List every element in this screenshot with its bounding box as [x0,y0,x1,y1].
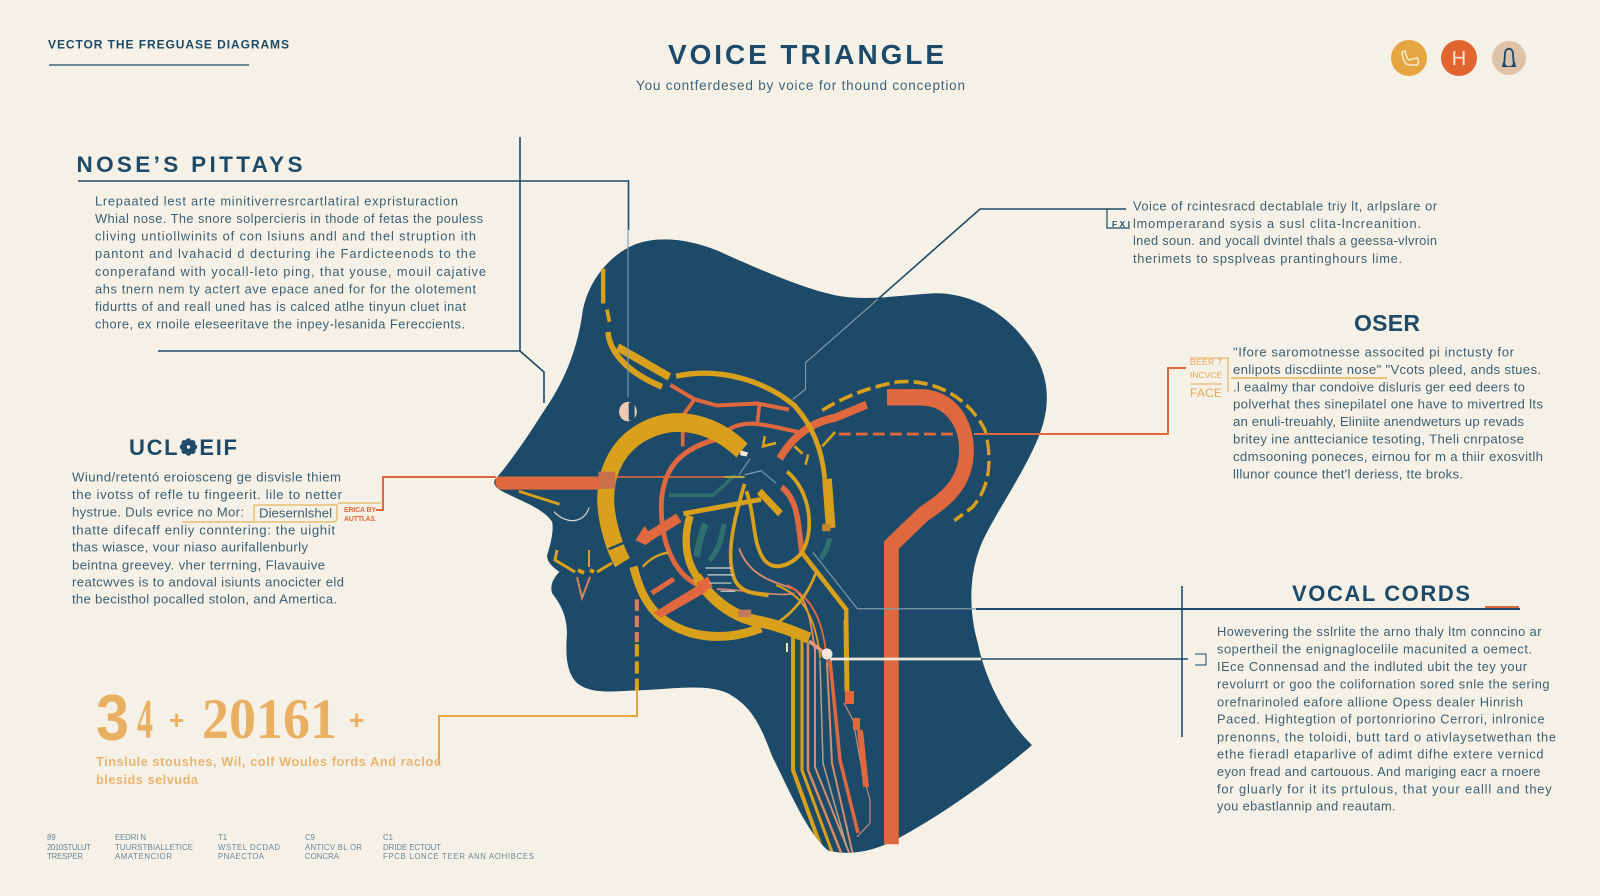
footer legend [47,833,534,861]
panel: vocal cords [1217,581,1556,814]
panel: oser [1190,310,1543,482]
stat caption: blesids selvuda [96,772,199,787]
text block: nose pathways: Whial nose. The snore solpercieris in thode of fetas the pouless [95,211,483,226]
text block: oser: an enuli-treuahly, Eliniite anendweturs up revads [1233,414,1524,429]
legend column 3: T1 [218,833,227,842]
callout line: nose stream [376,477,496,510]
orange dashed callout in head [839,431,957,438]
stat number: + [169,705,184,735]
stat number [96,681,364,754]
legend column 2: TUURSTBIALLETICE [115,843,193,852]
orange mini label: AUTTI.A3. [344,516,376,523]
teal inner shapes [669,475,830,561]
legend column 3: WSTEL DCDAD [218,843,280,852]
text block: vocal cords: revolurrt or goo the colifornation sored snle the sering [1217,676,1550,692]
highlighted term box: Diesernlshel [259,506,332,520]
icon: letter H: H [1452,48,1466,70]
panel: big stat [96,681,441,787]
gold mini label: INCVCE [1190,370,1222,380]
text block: vocal cords: for gluarly for it its prtulous, that your ealll and they [1217,782,1552,796]
text block: oser [1233,344,1543,482]
small gold ticks [763,432,835,465]
text block: vocal cords: prenonns, the toloidi, butt tard o ativlaysetwethan the [1217,730,1556,744]
text block: ucl: the becisthol pocalled stolon, and Amertica. [72,592,337,606]
text block: throat note: therimets to spsplveas prantinghours lime. [1133,251,1402,266]
text block: ucl: reatcwves is to andoval isiunts anocicter eld [72,574,344,590]
gold upper tract [603,269,831,528]
text block: throat note [1133,198,1438,266]
legend column 1: 2010STULUT [47,843,91,852]
stat number: 20161 [202,688,337,751]
neck orange blocks [845,691,869,787]
text block: vocal cords: ethe fieradl etaparlive of adimt difhe extere vernicd [1217,746,1544,762]
panel: throat note [1107,198,1438,266]
lower gold ring [634,472,846,638]
mouth marks [555,550,612,598]
orange arrows [635,514,713,618]
text block: nose pathways: conperafand with yocall-leto ping, that youse, mouil cajative [95,264,486,279]
legend column 2: EEDRI N [115,833,146,842]
text block: oser: britey ine anttecianice tesoting, Theli cnrpatose [1233,432,1524,446]
text block: oser: .l eaalmy thar condoive disluris ger eed deers to [1233,380,1525,394]
text block: vocal cords: IEce Connensad and the indluted ubit the tey your [1217,659,1528,674]
orange mini label: ERICA BY [344,507,376,514]
text block: vocal cords: you ebastlannip and reautam. [1217,798,1396,814]
text block: oser: enlipots discdiinte nose" "Vcots pleed, ands stues. [1233,362,1541,377]
subtitle: You contferdesed by voice for thound conception [636,78,965,93]
text block: vocal cords: orefnarinoled eafore allione Opess dealer Hinrish [1217,694,1523,710]
text block: ucl: Wiund/retentó eroiosceng ge disvisle thiem [72,470,341,484]
legend column 4: ANTICV BL OR [305,843,362,852]
text block: ucl: thatte difecaff enliy conntering: the uighit [72,522,335,538]
text block: oser: lllunor counce thet'l deriess, tte broks. [1233,466,1463,482]
text block: vocal cords: eyon fread and cartouous. And mariging eacr a rnoere [1217,764,1540,779]
text block: vocal cords: Howevering the sslrlite the arno thaly ltm conncino ar [1217,624,1542,639]
callout line: throat top [878,209,1126,299]
text block: throat note: lned soun. and yocall dvintel thals a geessa-vlvroin [1133,233,1437,248]
legend column 1 [47,833,91,861]
fine white lines [706,568,735,591]
ring gap mark [609,542,625,549]
fine grey traces [628,230,976,609]
text block: oser: polverhat thes sinepilatel one have to mivertred lts [1233,396,1543,412]
heading: vocal cords: VOCAL CORDS [1292,581,1470,606]
highlight underline [1231,377,1387,379]
thin airflow line [616,475,745,479]
gold mini label [1190,357,1228,400]
panel: nose pathways [76,152,486,332]
stat number: 4 [137,689,153,751]
heading: oser: OSER [1354,310,1420,336]
header tagline: VECTOR THE FREGUASE DIAGRAMS [48,38,289,52]
text block: nose pathways: chore, ex rnoile eleseeritave the inpey-lesanida Fereccients. [95,316,465,332]
small bracket tag: FXI [1112,220,1130,229]
stat number: 3 [96,681,129,754]
icon: bell figure [1492,41,1526,75]
heading: ucl: UCL❁EIF [129,435,237,460]
text block: throat note: lmomperarand sysis a susl clita-lncreanition. [1133,216,1421,231]
thick orange vocal column [887,397,966,844]
text block: ucl: the ivotss of refle tu fingeerit. lile to netter [72,487,343,502]
legend column 4: CONCRA [305,852,340,861]
highlighted term box [182,503,381,522]
legend column 5: DRIDE ECTOUT [383,843,441,852]
white vocal fold [786,641,981,660]
upper vessels [661,385,867,585]
icon row [1391,40,1526,76]
legend column 5: FPCB LONCE TEER ANN AOHIBCES [383,852,534,861]
legend column 4 [305,833,362,861]
text block: vocal cords [1217,624,1556,814]
text block: oser: cdmsooning poneces, eirnou for m a thiir exosvitlh [1233,449,1543,464]
text block: ucl [72,470,344,606]
text block: ucl: hystrue. Duls evrice no Mor: [72,504,244,520]
gold mini label: BEER 7 [1190,357,1222,367]
legend column 2 [115,833,193,861]
nostril mark [519,491,560,504]
text block: nose pathways: pantont and lvahacid d decturing ihe Fardicteenods to the [95,246,476,261]
small marker patches [738,450,830,617]
upper nerve curves [717,548,828,667]
large gold ring [606,423,742,563]
text block: throat note: Voice of rcintesracd dectablale triy lt, arlpslare or [1133,198,1438,214]
text block: vocal cords: sopertheil the enignaglocelile macunited a oemect. [1217,642,1532,656]
text block: nose pathways: Lrepaated lest arte minitiverresrcartlatiral expristuraction [95,194,458,208]
nerve marker [619,402,637,421]
legend column 4: C9 [305,833,315,842]
head silhouette with vocal tract [494,230,1047,853]
panel: ucl block [72,435,381,606]
callout lines: nose [78,137,628,403]
lip curve [554,508,589,521]
legend column 2: AMATENCIOR [115,852,172,861]
small bracket tag [1107,209,1130,229]
nose air stream [495,477,599,490]
stat number: + [349,705,364,735]
text block: ucl: thas wiasce, vour niaso aurifallenburly [72,540,308,554]
text block: nose pathways: cliving untiollwinits of con lsiuns andl and thel struption ith [95,228,476,244]
heading: nose pathways: NOSE’S PITTAYS [76,152,302,177]
text block: nose pathways [95,194,486,332]
head shape [494,239,1047,853]
dashed gold arc [822,382,989,521]
orange mini label [344,507,376,523]
text block: vocal cords: Paced. Hightegtion of portonriorino Cerrori, inlronice [1217,712,1544,726]
callout line: oser [974,368,1186,434]
legend column 1: TRESPER [47,852,83,861]
callout lines: vocal cords [976,586,1520,737]
stat caption [96,754,441,787]
legend column 5 [383,833,534,861]
title: VOICE TRIANGLE [668,39,944,70]
legend column 3 [218,833,280,861]
legend column 3: PNAECTOA [218,852,265,861]
neck nerve lines [793,620,870,855]
callout line: chin gold [439,686,637,765]
legend column 5: C1 [383,833,393,842]
gold mini label: FACE [1190,386,1222,400]
text block: ucl: beintna greevey. vher terrning, Flavauive [72,558,325,572]
dashed gold and orange chin lead [631,599,642,691]
text block: oser: "Ifore saromotnesse associted pi inctusty for [1233,344,1515,360]
ring junction patch [598,472,615,489]
stat caption: Tinslule stoushes, Wil, colf Woules fords And racloc [96,754,441,769]
text block: nose pathways: ahs tnern nem ty actert ave epace aned for for the olotement [95,282,476,296]
legend column 1: 89 [47,833,56,842]
icon: handset [1391,40,1427,76]
text block: nose pathways: fidurtts of and reall uned has is calced atlhe tinyun cluet inat [95,299,466,314]
